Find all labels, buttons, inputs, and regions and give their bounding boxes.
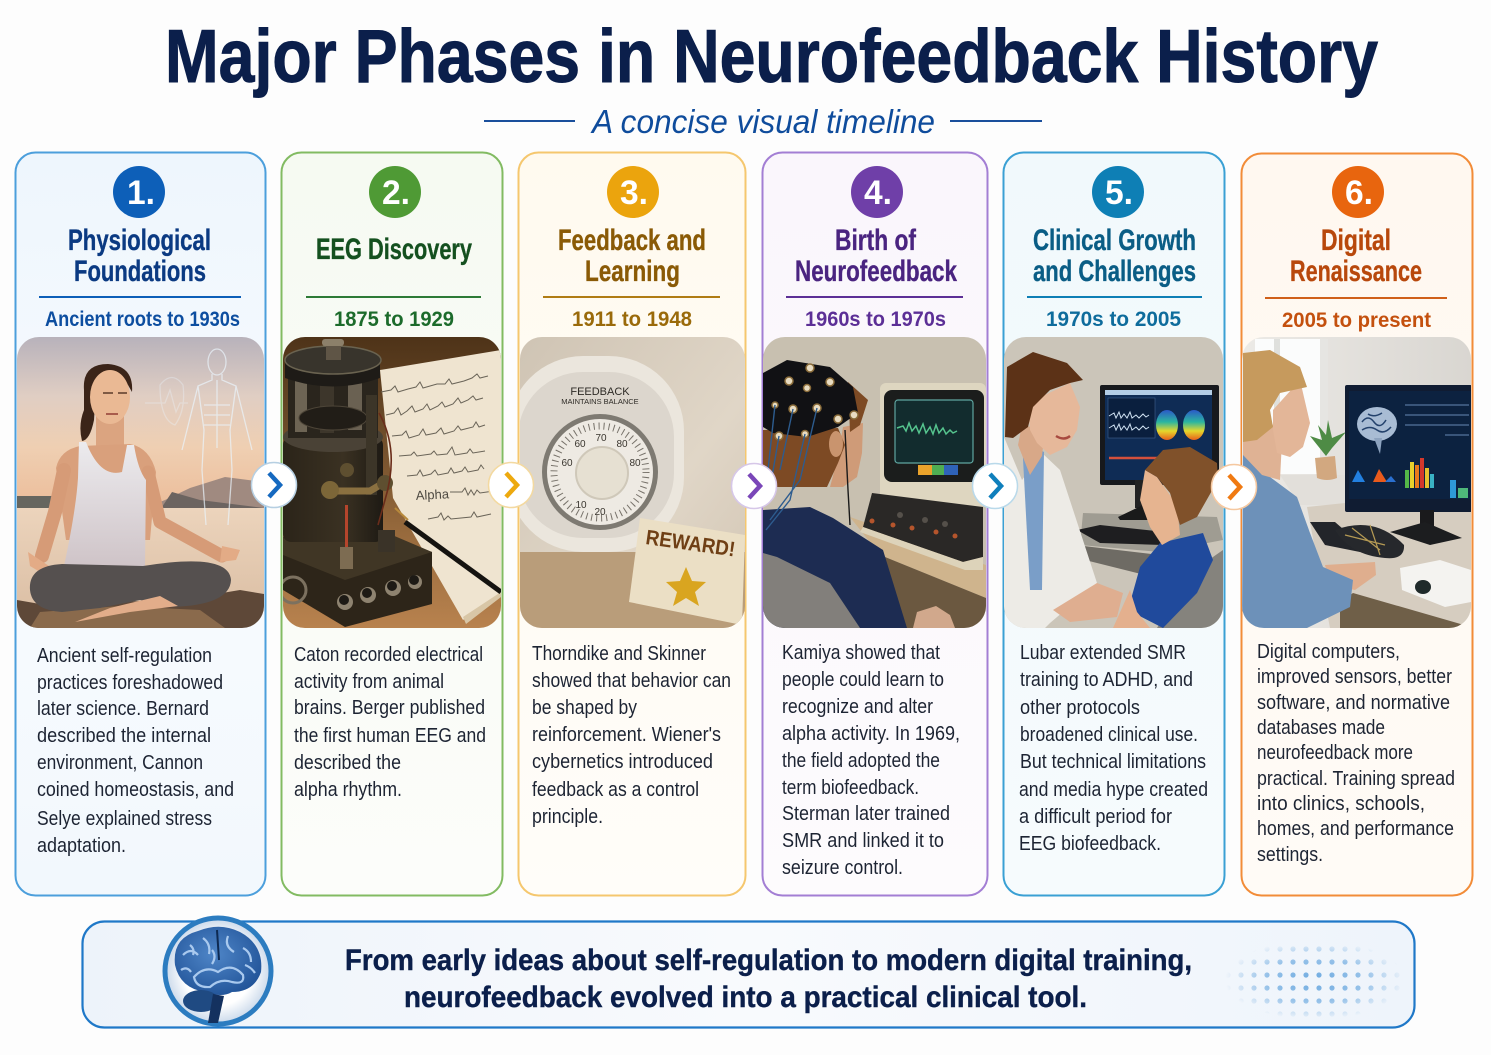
body text: reinforcement. Wiener's <box>532 724 721 746</box>
body text: EEG biofeedback. <box>1019 833 1161 855</box>
body text: Ancient self-regulation <box>37 645 212 667</box>
image: thermostat and reward card: FEEDBACK <box>570 386 630 398</box>
badge: number 2: 2. <box>382 174 410 212</box>
image: thermostat and reward card: REWARD! <box>644 526 737 561</box>
body text: practical. Training spread <box>1257 768 1455 790</box>
badge: number 5 <box>1092 166 1144 218</box>
body text <box>1257 641 1455 866</box>
heading: digital renaissance: Digital <box>1321 224 1391 257</box>
arrow: 3 to 4 <box>732 464 776 508</box>
body text: other protocols <box>1020 697 1140 719</box>
heading: feedback and learning: Learning <box>585 255 680 288</box>
body text: Kamiya showed that <box>782 642 940 664</box>
badge: number 3 <box>607 166 659 218</box>
banner: conclusion <box>82 918 1414 1028</box>
body text: Selye explained stress <box>37 808 212 830</box>
body text: showed that behavior can <box>532 670 731 692</box>
image: thermostat and reward card: 60 <box>574 439 586 450</box>
body text: But technical limitations <box>1020 751 1206 773</box>
body text: Lubar extended SMR <box>1020 642 1186 664</box>
heading: physiological foundations <box>68 224 211 288</box>
panel: phase 5 clinical growth and challenges <box>1004 152 1224 896</box>
heading: birth of neurofeedback <box>795 224 957 288</box>
body text: seizure control. <box>782 857 903 879</box>
badge: number 2 <box>369 166 421 218</box>
image: vintage galvanometer and EEG traces: Alpha <box>415 486 450 503</box>
image: thermostat and reward card <box>508 337 745 628</box>
body text: cybernetics introduced <box>532 751 713 773</box>
heading: birth of neurofeedback: Birth of <box>835 224 917 257</box>
badge: number 6: 6. <box>1345 174 1373 212</box>
image: thermostat and reward card: MAINTAINS BALANCE <box>561 397 639 406</box>
body text: feedback as a control <box>532 779 699 801</box>
body text: into clinics, schools, <box>1257 793 1425 815</box>
body text: be shaped by <box>532 697 637 719</box>
body text: alpha rhythm. <box>294 779 402 801</box>
body text: databases made <box>1257 717 1385 739</box>
body text <box>1019 642 1208 855</box>
body text: homes, and performance <box>1257 818 1454 840</box>
body text <box>782 642 960 879</box>
body text: software, and normative <box>1257 692 1450 714</box>
body text: term biofeedback. <box>782 777 919 799</box>
heading: clinical growth and challenges <box>1033 224 1196 288</box>
body text: Sterman later trained <box>782 803 950 825</box>
body text: activity from animal <box>294 671 444 693</box>
body text: later science. Bernard <box>37 698 209 720</box>
image: vintage galvanometer and EEG traces <box>280 337 501 628</box>
body text: neurofeedback more <box>1257 742 1413 764</box>
heading: birth of neurofeedback: Neurofeedback <box>795 255 957 288</box>
body text: brains. Berger published <box>294 697 485 719</box>
body text <box>37 645 234 857</box>
arrow: 2 to 3 <box>488 462 534 508</box>
body text: principle. <box>532 806 603 828</box>
heading: clinical growth and challenges: Clinical Growth <box>1033 224 1196 257</box>
date range: 1875 to 1929 <box>334 307 454 331</box>
arrow: 4 to 5 <box>972 464 1018 508</box>
body text: Thorndike and Skinner <box>532 643 706 665</box>
image: meditating woman by the sea <box>17 337 264 628</box>
heading: digital renaissance <box>1290 224 1422 288</box>
body text: a difficult period for <box>1019 806 1172 828</box>
image: clinician and boy at brain-map monitor <box>1004 337 1223 628</box>
body text: recognize and alter <box>782 696 933 718</box>
body text <box>532 643 731 828</box>
body text: coined homeostasis, and <box>37 779 234 801</box>
date range: 1960s to 1970s <box>805 307 946 331</box>
body text: described the <box>294 752 401 774</box>
image: thermostat and reward card: 70 <box>595 433 607 444</box>
heading: physiological foundations: Physiological <box>68 224 211 257</box>
image: thermostat and reward card: 20 <box>594 507 606 518</box>
body text: Caton recorded electrical <box>294 644 483 666</box>
panel: phase 4 birth of neurofeedback <box>762 152 988 896</box>
body text: adaptation. <box>37 835 126 857</box>
subtitle with rules: A concise visual timeline <box>590 103 935 140</box>
date range: 2005 to present <box>1282 308 1431 332</box>
panel: phase 6 digital renaissance <box>1242 154 1472 896</box>
body text <box>294 644 486 801</box>
body text: improved sensors, better <box>1257 666 1452 688</box>
heading: clinical growth and challenges: and Challenges <box>1033 255 1196 288</box>
heading: feedback and learning: Feedback and <box>558 224 706 257</box>
badge: number 6 <box>1332 166 1384 218</box>
date range: 1911 to 1948 <box>572 307 692 331</box>
image: thermostat and reward card: 60 <box>561 458 573 469</box>
body text: settings. <box>1257 844 1323 866</box>
dot pattern <box>1228 946 1400 1016</box>
image: thermostat and reward card: 80 <box>629 458 641 469</box>
badge: number 1: 1. <box>127 174 155 212</box>
date range: Ancient roots to 1930s <box>45 307 240 331</box>
body text: practices foreshadowed <box>37 672 223 694</box>
body text: training to ADHD, and <box>1020 669 1193 691</box>
heading: feedback and learning <box>558 224 706 288</box>
badge: number 3: 3. <box>620 174 648 212</box>
image: thermostat and reward card: 10 <box>575 500 587 511</box>
arrow: 5 to 6 <box>1212 464 1256 510</box>
image: thermostat and reward card: 80 <box>616 439 628 450</box>
badge: number 5: 5. <box>1105 174 1133 212</box>
body text: environment, Cannon <box>37 752 203 774</box>
body text: the field adopted the <box>782 750 940 772</box>
date range: 1970s to 2005 <box>1046 307 1181 331</box>
badge: number 1 <box>113 166 165 218</box>
heading: digital renaissance: Renaissance <box>1290 255 1422 288</box>
image: person in EEG cap at CRT monitor <box>763 337 986 628</box>
banner statement <box>345 944 1192 1014</box>
body text: people could learn to <box>782 669 944 691</box>
badge: number 4: 4. <box>864 174 892 212</box>
body text: the first human EEG and <box>294 725 486 747</box>
panel: phase 1 physiological foundations <box>16 152 266 896</box>
banner statement: From early ideas about self-regulation to modern digital training, <box>345 944 1192 977</box>
heading: EEG discovery: EEG Discovery <box>316 233 472 266</box>
image: woman at digital neurofeedback workstation <box>1242 337 1472 628</box>
badge: number 4 <box>851 166 903 218</box>
body text: Digital computers, <box>1257 641 1400 663</box>
body text: described the internal <box>37 725 211 747</box>
body text: and media hype created <box>1019 779 1208 801</box>
icon: brain in circle <box>165 918 271 1024</box>
banner statement: neurofeedback evolved into a practical clinical tool. <box>404 981 1087 1014</box>
panel: phase 2 EEG discovery <box>280 152 502 896</box>
body text: broadened clinical use. <box>1020 724 1198 746</box>
arrow: 1 to 2 <box>252 462 296 508</box>
body text: SMR and linked it to <box>782 830 944 852</box>
body text: alpha activity. In 1969, <box>782 723 960 745</box>
panel: phase 3 feedback and learning <box>508 152 746 896</box>
heading: physiological foundations: Foundations <box>74 255 206 288</box>
